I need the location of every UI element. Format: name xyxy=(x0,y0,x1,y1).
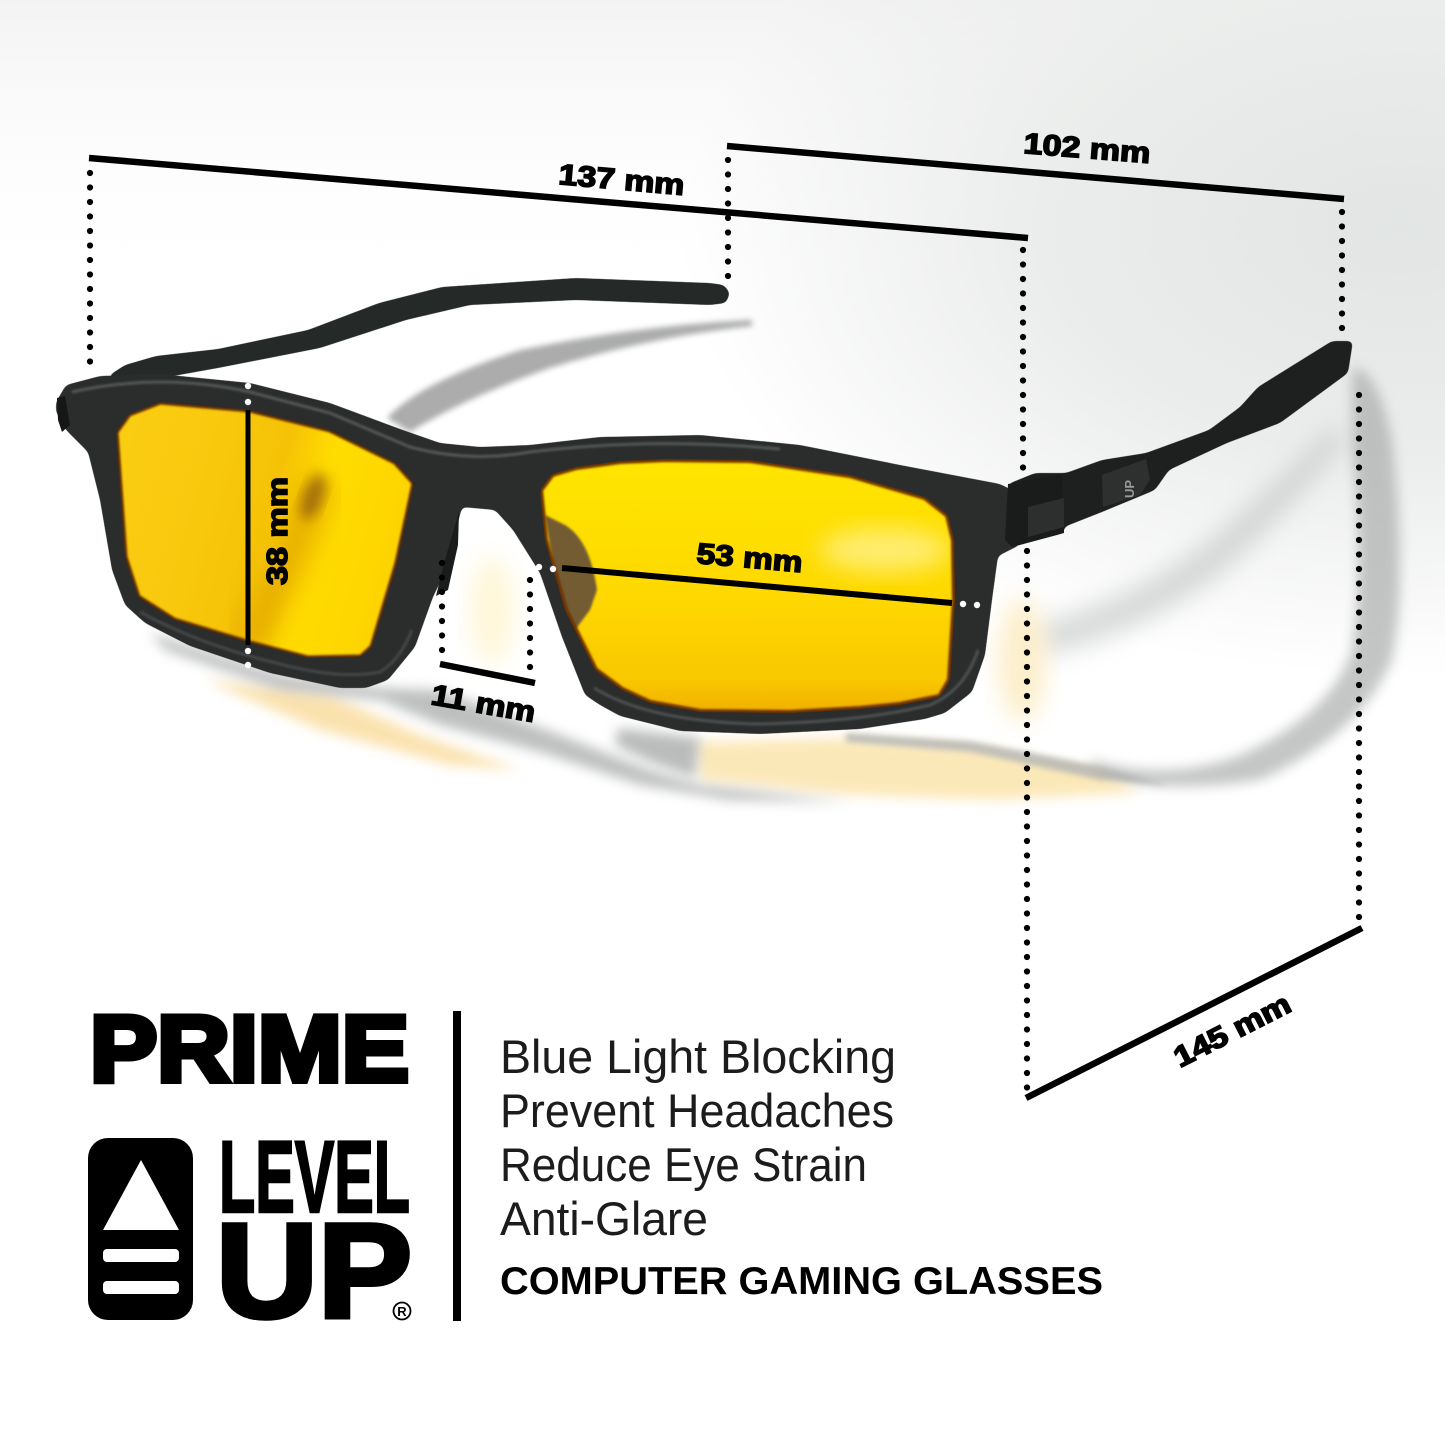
right lens xyxy=(540,459,955,713)
label: 38 mm xyxy=(262,477,294,585)
subtitle: COMPUTER GAMING GLASSES xyxy=(500,1260,1103,1303)
lens rim shade xyxy=(540,459,955,713)
shadow: near temple xyxy=(1090,368,1400,786)
glow: right of frame xyxy=(998,598,1046,722)
dimension: 53 mm lens width xyxy=(536,538,980,608)
measure line xyxy=(440,664,535,683)
label: 137 mm xyxy=(557,159,686,202)
label: 53 mm xyxy=(695,538,804,579)
dimension: 11 mm bridge xyxy=(429,563,538,729)
dotted guide xyxy=(1339,212,1345,330)
measure line xyxy=(89,158,1028,238)
dimension: 102 mm temple length xyxy=(727,128,1344,330)
frame front xyxy=(56,374,1020,734)
measure line xyxy=(1026,928,1362,1098)
dotted guide xyxy=(1020,250,1026,470)
shadow: temple inner band xyxy=(1040,425,1345,655)
dotted guide xyxy=(725,160,731,277)
logo icon xyxy=(88,1138,193,1320)
far temple arm xyxy=(105,278,730,380)
dotted guide xyxy=(527,580,533,668)
feature list: Anti-Glare xyxy=(500,1192,708,1245)
lens reflection: dark streak xyxy=(250,480,320,650)
glow: near bridge xyxy=(470,555,514,665)
dotted guide xyxy=(1024,551,1030,1092)
shadow: grey patch under right lens xyxy=(615,728,700,778)
near temple arm xyxy=(1008,341,1353,547)
dotted guide xyxy=(87,173,93,365)
lens reflection: white glow xyxy=(820,528,950,572)
lens rim shade xyxy=(116,402,414,658)
registered mark xyxy=(394,1302,410,1320)
logo wordmark: LEVEL xyxy=(219,1120,410,1234)
feature list: Blue Light Blocking xyxy=(500,1030,896,1083)
measure line xyxy=(246,410,250,645)
logo wordmark: R xyxy=(397,1304,407,1319)
frame highlight: lower rim right xyxy=(594,650,978,724)
label: 11 mm xyxy=(429,679,538,729)
feature list: Prevent Headaches xyxy=(500,1084,894,1137)
logo wordmark xyxy=(216,1120,412,1346)
measure line xyxy=(562,568,952,603)
temple logo text: UP xyxy=(1122,480,1137,498)
shadow: grey band under left lens xyxy=(150,633,850,802)
shadow: grey edge under right lens xyxy=(846,733,1170,785)
dotted guide xyxy=(1356,395,1362,924)
label: 145 mm xyxy=(1169,988,1296,1074)
dimension: 38 mm lens height xyxy=(245,383,294,668)
shadow: far temple xyxy=(387,320,752,432)
dimension: 145 mm depth xyxy=(1026,395,1362,1098)
frame highlight: top edge xyxy=(72,382,780,456)
photo: glasses and shadows xyxy=(56,278,1400,802)
feature list xyxy=(500,1030,896,1245)
title: PRIME: PRIME xyxy=(90,996,409,1101)
dimension: 137 mm temple-to-temple width xyxy=(89,158,1028,470)
hinge: right xyxy=(1005,474,1064,547)
shadow: pale yellow under right lens xyxy=(697,738,1140,800)
vertical divider xyxy=(453,1011,461,1321)
nose pad xyxy=(436,512,459,596)
feature list: Reduce Eye Strain xyxy=(500,1138,867,1191)
end dots xyxy=(536,564,980,608)
frame highlight: lower rim left xyxy=(140,612,412,675)
logo wordmark: UP xyxy=(216,1197,412,1346)
lens reflection: temple blotch xyxy=(295,471,331,523)
temple logo badge xyxy=(1102,459,1150,507)
left lens xyxy=(116,402,414,658)
dotted guide xyxy=(439,563,445,651)
hinge: right highlight xyxy=(1028,498,1064,537)
measure line xyxy=(727,146,1344,199)
hinge: left xyxy=(57,396,70,432)
nose pad seen through lens xyxy=(545,515,597,630)
shadow: pale yellow under left lens xyxy=(205,680,520,770)
label: 102 mm xyxy=(1022,128,1152,170)
end dots xyxy=(245,383,251,668)
